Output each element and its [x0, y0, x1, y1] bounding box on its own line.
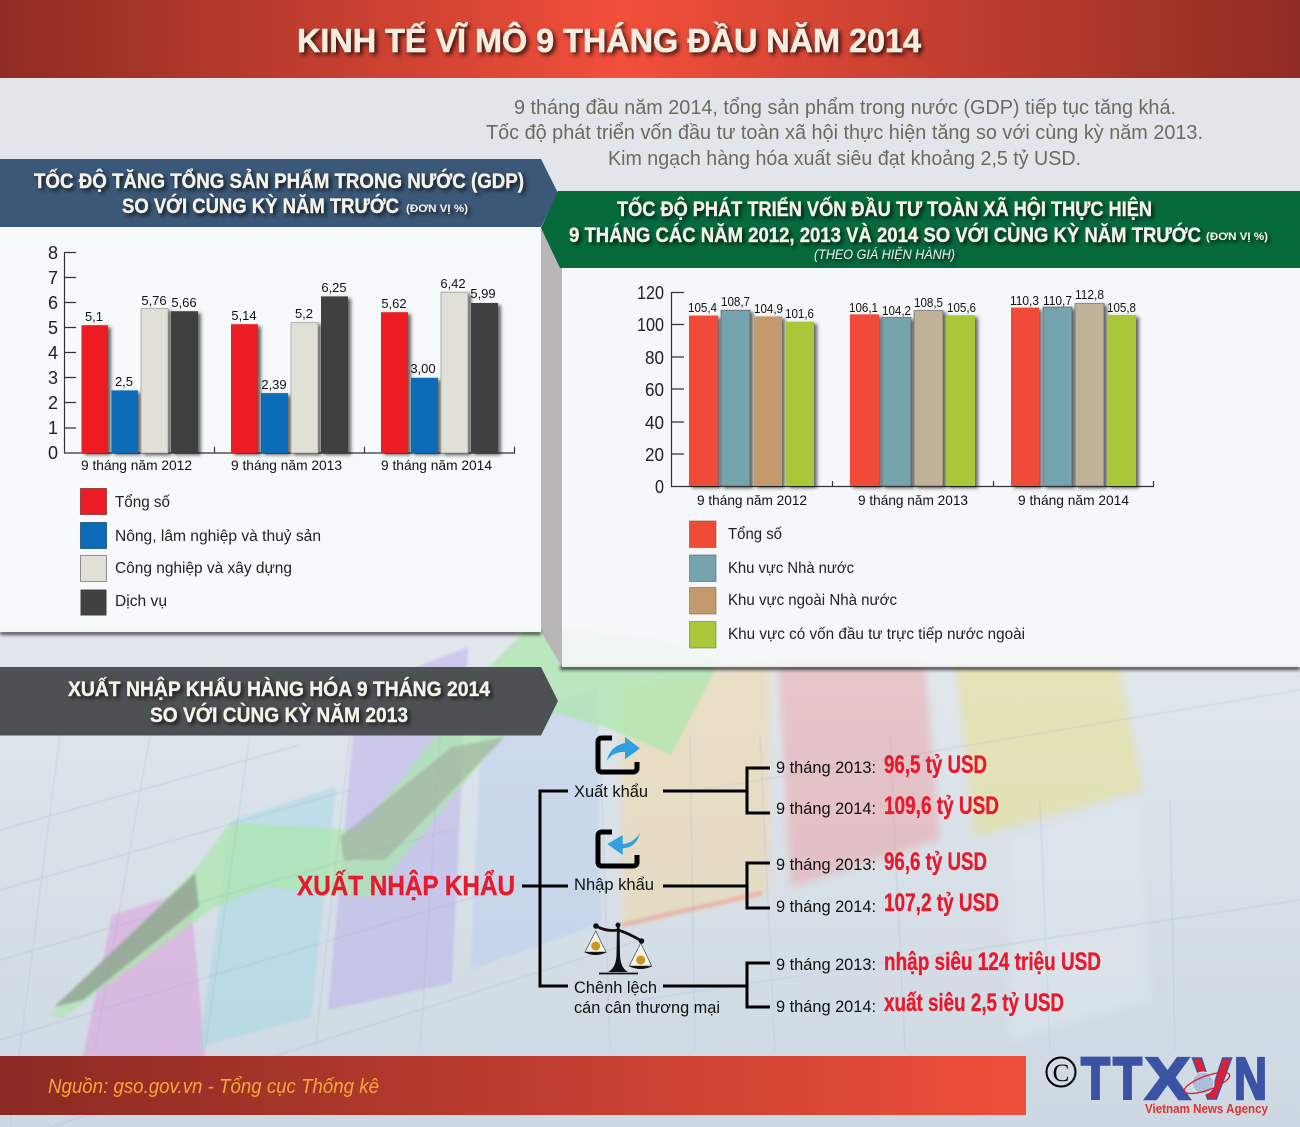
legend: GDP growth: Dịch vụ: [115, 593, 167, 610]
bar chart: GDP growth: 6: [48, 293, 58, 313]
bar chart: GDP growth: 7: [48, 268, 58, 288]
heading: GDP growth: (ĐƠN VỊ %): [406, 203, 468, 215]
bar chart: investment capital: 110,3: [1010, 293, 1039, 308]
bar chart: GDP growth: 9 tháng năm 2012: [81, 457, 192, 473]
export values: 96,5 tỷ USD: [884, 751, 987, 779]
bar chart: investment capital: 104,9: [754, 301, 783, 316]
intro text: 9 tháng đầu năm 2014, tổng sản phẩm trong nước (GDP) tiếp tục tăng khá.: [514, 97, 1176, 119]
bar chart: GDP growth: 2: [48, 393, 58, 413]
trade balance values: 9 tháng 2013:: [776, 955, 876, 974]
import values: [776, 848, 999, 917]
bar chart: investment capital: 0: [655, 477, 664, 497]
legend: investment capital: Khu vực Nhà nước: [728, 560, 854, 577]
icon: import: [598, 832, 640, 866]
logo: TTXVN: [1046, 1046, 1268, 1116]
logo: TTXVN: N: [1234, 1046, 1267, 1112]
bar chart: investment capital: 106,1: [849, 300, 878, 315]
heading: import export: SO VỚI CÙNG KỲ NĂM 2013: [150, 702, 408, 727]
bar chart: investment capital: 100: [637, 315, 664, 335]
title banner: KINH TẾ VĨ MÔ 9 THÁNG ĐẦU NĂM 2014: [297, 21, 922, 59]
bar chart: GDP growth: 9 tháng năm 2013: [231, 457, 342, 473]
intro text: Kim ngạch hàng hóa xuất siêu đạt khoảng 2,5 tỷ USD.: [608, 148, 1081, 170]
bar chart: investment capital: 108,5: [914, 295, 943, 310]
bar chart: GDP growth: 3: [48, 368, 58, 388]
bar chart: GDP growth: 5,1: [85, 309, 103, 324]
bar chart: GDP growth: 4: [48, 343, 58, 363]
export values: [776, 751, 999, 820]
bar chart: GDP growth: 5: [48, 318, 58, 338]
bar chart: GDP growth: 5,62: [381, 296, 407, 311]
legend: investment capital: [690, 521, 1025, 648]
import values: 107,2 tỷ USD: [884, 889, 999, 917]
legend: investment capital: Khu vực có vốn đầu tư trực tiếp nước ngoài: [728, 626, 1025, 643]
label: trade balance: Chênh lệch: [574, 978, 657, 997]
legend: GDP growth: Tổng số: [115, 494, 170, 511]
bar chart: GDP growth: 0: [48, 443, 58, 463]
bar chart: investment capital: 120: [637, 283, 664, 303]
bar chart: investment capital: 101,6: [785, 306, 814, 321]
bar chart: GDP growth: 5,2: [295, 306, 313, 321]
logo: TTXVN: V: [1192, 1046, 1232, 1112]
connector lines: [522, 768, 770, 1007]
bar chart: investment capital: 9 tháng năm 2013: [858, 492, 968, 508]
import values: 9 tháng 2014:: [776, 897, 876, 916]
root label: XUẤT NHẬP KHẨU: [297, 870, 515, 901]
bar chart: investment capital: [637, 283, 1154, 508]
bar chart: investment capital: 20: [645, 445, 664, 465]
bar chart: GDP growth: [48, 243, 514, 473]
bar chart: investment capital: 80: [645, 348, 664, 368]
bar chart: GDP growth: 2,39: [261, 377, 287, 392]
trade balance values: 9 tháng 2014:: [776, 997, 876, 1016]
label: trade balance: [574, 978, 720, 1017]
legend: GDP growth: Nông, lâm nghiệp và thuỷ sản: [115, 528, 321, 545]
trade balance values: xuất siêu 2,5 tỷ USD: [884, 989, 1064, 1017]
bar chart: investment capital: 110,7: [1043, 293, 1072, 308]
heading: GDP growth: TỐC ĐỘ TĂNG TỔNG SẢN PHẨM TRONG NƯỚC (GDP): [34, 167, 524, 193]
title banner: [0, 0, 1300, 78]
label: import: Nhập khẩu: [574, 875, 654, 894]
bar chart: investment capital: 9 tháng năm 2014: [1018, 492, 1129, 508]
bar chart: GDP growth: 5,14: [231, 308, 257, 323]
heading: investment capital: TỐC ĐỘ PHÁT TRIỂN VỐN ĐẦU TƯ TOÀN XÃ HỘI THỰC HIỆN: [617, 195, 1152, 221]
bar chart: investment capital: 40: [645, 413, 664, 433]
bar chart: investment capital: 105,8: [1107, 300, 1136, 315]
bar chart: investment capital: 9 tháng năm 2012: [697, 492, 807, 508]
heading: investment capital: (THEO GIÁ HIỆN HÀNH): [814, 246, 955, 262]
label: export: Xuất khẩu: [574, 782, 648, 801]
bar chart: GDP growth: 5,99: [470, 286, 496, 301]
panel: connecting grey fold: [541, 228, 562, 667]
trade balance values: [776, 948, 1101, 1017]
legend: investment capital: Khu vực ngoài Nhà nước: [728, 592, 897, 609]
icon: balance scale: [584, 922, 652, 974]
bar chart: investment capital: 104,2: [882, 303, 911, 318]
diagram: import export tree: [297, 737, 1101, 1017]
bar chart: GDP growth: 5,66: [171, 295, 197, 310]
export values: 9 tháng 2014:: [776, 799, 876, 818]
footer source bar: Nguồn: gso.gov.vn - Tổng cục Thống kê: [48, 1076, 379, 1098]
label: trade balance: cán cân thương mại: [574, 998, 720, 1017]
heading: investment capital: (ĐƠN VỊ %): [1206, 231, 1268, 243]
heading: investment capital: [541, 191, 1300, 268]
bar chart: GDP growth: 8: [48, 243, 58, 263]
bar chart: GDP growth: 1: [48, 418, 58, 438]
heading: import export: [0, 667, 558, 736]
logo: TTXVN: Vietnam News Agency: [1145, 1102, 1268, 1116]
legend: GDP growth: Công nghiệp và xây dựng: [115, 560, 292, 577]
import values: 9 tháng 2013:: [776, 855, 876, 874]
bar chart: GDP growth: 6,42: [440, 276, 466, 291]
bar chart: GDP growth: 5,76: [141, 293, 167, 308]
heading: investment capital: 9 THÁNG CÁC NĂM 2012, 2013 VÀ 2014 SO VỚI CÙNG KỲ NĂM TRƯỚC: [569, 222, 1201, 247]
heading: GDP growth: [0, 159, 558, 227]
legend: GDP growth: [80, 488, 321, 616]
panel: investment capital: [541, 191, 1300, 670]
intro text: Tốc độ phát triển vốn đầu tư toàn xã hội thực hiện tăng so với cùng kỳ năm 2013.: [486, 122, 1203, 144]
footer source bar: [0, 1056, 1026, 1115]
logo: TTXVN: C: [1053, 1060, 1069, 1087]
bar chart: investment capital: 108,7: [721, 294, 750, 309]
export values: 9 tháng 2013:: [776, 758, 876, 777]
bar chart: investment capital: 112,8: [1075, 287, 1104, 302]
logo: TTXVN: X: [1145, 1046, 1190, 1112]
icon: export: [598, 737, 640, 772]
bar chart: GDP growth: 9 tháng năm 2014: [381, 457, 492, 473]
export values: 109,6 tỷ USD: [884, 792, 999, 820]
heading: GDP growth: SO VỚI CÙNG KỲ NĂM TRƯỚC: [122, 193, 399, 218]
bar chart: GDP growth: 6,25: [321, 280, 347, 295]
intro text: [486, 97, 1203, 170]
trade balance values: nhập siêu 124 triệu USD: [884, 948, 1101, 976]
legend: investment capital: Tổng số: [728, 526, 782, 543]
bar chart: GDP growth: 3,00: [410, 361, 436, 376]
logo: TTXVN: T: [1113, 1046, 1142, 1112]
bar chart: investment capital: 60: [645, 380, 664, 400]
bar chart: GDP growth: 2,5: [115, 374, 133, 389]
bar chart: investment capital: 105,6: [947, 300, 976, 315]
logo: TTXVN: T: [1081, 1046, 1110, 1112]
import values: 96,6 tỷ USD: [884, 848, 987, 876]
panel: GDP growth: [0, 159, 558, 635]
heading: import export: XUẤT NHẬP KHẨU HÀNG HÓA 9 THÁNG 2014: [68, 676, 490, 701]
bar chart: investment capital: 105,4: [688, 300, 717, 315]
